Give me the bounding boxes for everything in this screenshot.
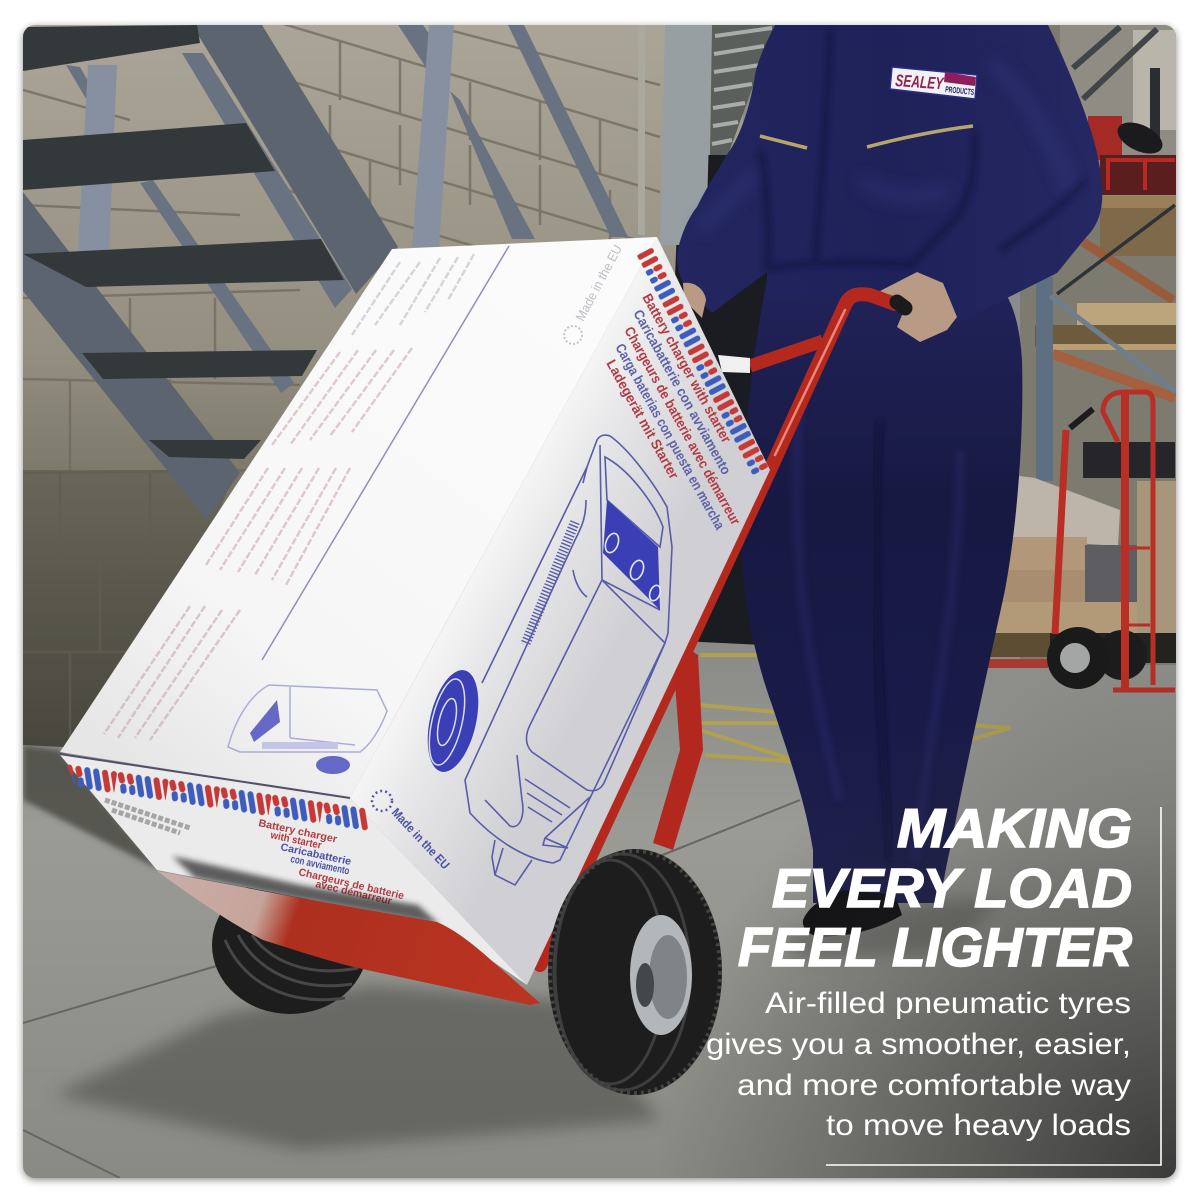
car cab outline (583, 435, 672, 643)
body copy: and more comfortable way (737, 1069, 1131, 1102)
box bottom face (60, 755, 527, 985)
cross bar (750, 341, 823, 366)
headlamps and grille (485, 755, 523, 827)
headline (738, 797, 1132, 978)
background trolley wheel (1047, 627, 1109, 689)
bottom face product names: con avviamento (289, 853, 351, 877)
made in the EU upper mark: Made in the EU (572, 242, 625, 323)
product names on box: Ladegerät mit Starter (603, 357, 683, 482)
rear window (605, 457, 663, 547)
body copy: Air-filled pneumatic tyres (765, 987, 1131, 1020)
box end stripes (636, 246, 770, 478)
stair treads (23, 25, 344, 459)
made in the EU upper mark (564, 242, 625, 344)
thin diagonals (66, 25, 628, 393)
body copy (706, 987, 1131, 1142)
tape seam (262, 246, 509, 660)
text frame (826, 807, 1161, 1165)
bottom face product names (257, 817, 405, 907)
pallet stack (1035, 303, 1176, 350)
chest pocket zips (760, 126, 973, 148)
rear wheel (212, 876, 368, 1014)
bottom face stripes (66, 763, 369, 832)
floor shadow (55, 985, 660, 1150)
mezzanine pallet (1100, 208, 1176, 256)
stair stringers (23, 25, 398, 520)
wheel hub (630, 915, 692, 1035)
warehouse wall (23, 20, 743, 750)
blue rack upright and brace (1036, 277, 1053, 481)
bumper (492, 840, 532, 885)
car vent (525, 522, 575, 645)
cardboard box (60, 237, 770, 985)
rack beams (1083, 242, 1173, 300)
background red trolleys (1055, 392, 1175, 690)
barcode area (105, 800, 190, 833)
car windscreen blue panel (603, 500, 662, 610)
stair columns (78, 25, 454, 251)
body copy: gives you a smoother, easier, (706, 1028, 1131, 1061)
red cart on mezzanine (1088, 116, 1176, 195)
box front face (350, 237, 770, 985)
faint instruction text on top face (104, 254, 474, 740)
yellow floor markings (680, 655, 1010, 762)
floor expansion joints (23, 800, 800, 1178)
worker in navy overalls (677, 25, 1102, 936)
bottom face product names: Battery charger (257, 817, 338, 846)
dark stock behind cartons (1083, 442, 1175, 478)
contact shadow on box (172, 856, 440, 925)
dark recess behind worker (675, 155, 767, 645)
bottom face product names: Caricabatterie (279, 841, 352, 868)
right hand (880, 272, 957, 342)
dark floor strip at wall (23, 745, 160, 870)
bottom face product names: avec démarreur (314, 878, 393, 907)
jacket folds (760, 30, 1085, 272)
lower made in the EU mark: Made in the EU (389, 805, 452, 872)
box top face (60, 237, 657, 798)
stacked cartons (987, 475, 1176, 663)
shoe (803, 890, 902, 936)
tyre tread (554, 854, 690, 1090)
headline: FEEL LIGHTER (738, 916, 1132, 978)
product names on box: Caricabatterie con avviamento (630, 307, 735, 477)
trousers (741, 280, 1022, 903)
steel post (660, 25, 712, 245)
small car drawing on top face (228, 685, 387, 774)
lower wall shade (23, 470, 235, 745)
white cross bar reflection (718, 355, 750, 373)
car wheel (419, 665, 487, 777)
jacket highlights (700, 60, 1070, 230)
left hand (683, 283, 706, 318)
upper stair rails (1073, 27, 1157, 99)
foot shadow (780, 900, 1000, 960)
jacket (677, 25, 1102, 323)
bottom face product names: Chargeurs de batterie (297, 866, 405, 902)
sack truck toe plate (157, 871, 540, 1005)
roof panel (526, 580, 665, 791)
staircase (23, 25, 777, 520)
corrugated shutter (710, 25, 777, 155)
sack truck frame (540, 294, 895, 965)
handle grip (897, 302, 905, 308)
body copy: to move heavy loads (826, 1109, 1131, 1142)
red floor strip (983, 659, 1048, 668)
lower strut (653, 650, 703, 850)
lower made in the EU mark (372, 791, 452, 872)
side arc (573, 570, 587, 597)
front wheel (548, 849, 722, 1095)
small car windscreen (250, 700, 280, 742)
cab frame (600, 445, 665, 643)
product names on box (603, 291, 744, 532)
headline: MAKING (897, 797, 1132, 859)
car body lines (465, 467, 665, 863)
main rail and handle (540, 294, 895, 965)
bottom face product names: with starter (268, 829, 323, 852)
trouser folds (876, 420, 890, 860)
product names on box: Battery charger with starter (639, 291, 735, 446)
product names on box: Carga baterias con puesta en marcha (612, 341, 728, 532)
headline: EVERY LOAD (772, 857, 1132, 919)
Sealey badge: SEALEY (895, 71, 945, 93)
warehouse floor (23, 640, 1176, 1178)
right background racks (983, 25, 1176, 690)
corner darkening (650, 650, 1176, 1178)
Sealey badge: PRODUCTS (945, 84, 975, 97)
second background wheel (1105, 630, 1146, 680)
Sealey badge (890, 67, 977, 99)
car line drawing on box (465, 435, 672, 885)
product names on box: Chargeurs de batterie avec démarreur (621, 324, 744, 528)
